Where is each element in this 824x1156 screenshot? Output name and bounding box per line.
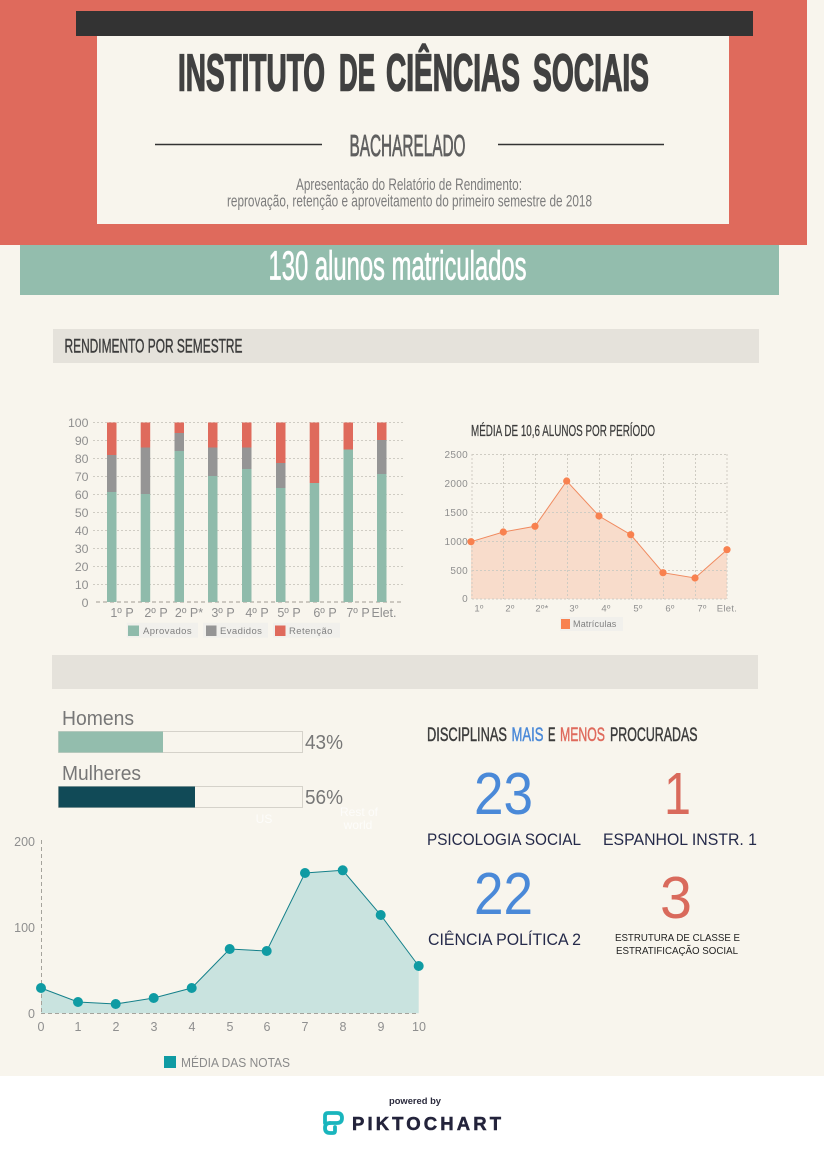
gender bar: mulheres: Mulheres bbox=[62, 763, 141, 785]
stacked bar chart bbox=[68, 416, 404, 638]
stat: estrutura de classe bbox=[615, 865, 740, 957]
stat: ciencia politica: 22 bbox=[474, 861, 533, 927]
faint map labels: US bbox=[256, 812, 272, 826]
area chart: media das notas: 8 bbox=[340, 1020, 347, 1034]
report description bbox=[227, 176, 592, 210]
faint map labels: world bbox=[343, 818, 372, 832]
gender bar: homens: 43% bbox=[305, 732, 343, 754]
chart legend: Matrículas bbox=[573, 619, 617, 629]
stacked bar chart: 10 bbox=[75, 578, 89, 592]
report description: Apresentação do Relatório de Rendimento: bbox=[296, 176, 522, 194]
stacked bar chart: 5º P bbox=[277, 606, 301, 620]
stat: estrutura de classe: ESTRUTURA DE CLASSE E bbox=[615, 933, 740, 944]
stat: psicologia social bbox=[427, 761, 581, 849]
stat: estrutura de classe: ESTRATIFICAÇÃO SOCIAL bbox=[616, 944, 738, 957]
area chart: matriculas: 3º bbox=[569, 604, 579, 614]
stacked bar chart: 70 bbox=[75, 470, 89, 484]
area chart: media das notas: 3 bbox=[151, 1020, 158, 1034]
gender bar: mulheres: 56% bbox=[305, 787, 343, 809]
area chart: matriculas: 2000 bbox=[445, 479, 468, 490]
stacked bar chart: 50 bbox=[75, 506, 89, 520]
area chart: media das notas: 4 bbox=[189, 1020, 196, 1034]
gender bar: mulheres bbox=[58, 763, 343, 809]
stacked bar chart: 2º P bbox=[144, 606, 168, 620]
chart legend bbox=[127, 623, 340, 638]
stacked bar chart: 90 bbox=[75, 434, 89, 448]
area chart: matriculas bbox=[445, 450, 737, 631]
gender bar: homens: Homens bbox=[62, 708, 134, 730]
stacked bar chart: Elet. bbox=[371, 606, 397, 620]
gender bar: homens bbox=[58, 708, 343, 754]
stacked bar chart: 40 bbox=[75, 524, 89, 538]
faint map labels bbox=[256, 805, 379, 832]
area chart: media das notas: 6 bbox=[264, 1020, 271, 1034]
area chart: media das notas: 7 bbox=[302, 1020, 309, 1034]
stat: estrutura de classe: 3 bbox=[660, 865, 692, 931]
area chart: media das notas: 5 bbox=[227, 1020, 234, 1034]
enrolled students band bbox=[20, 242, 779, 295]
area chart: media das notas: 0 bbox=[28, 1007, 35, 1021]
report description: reprovação, retenção e aproveitamento do primeiro semestre de 2018 bbox=[227, 192, 592, 210]
area chart: matriculas: 5º bbox=[633, 604, 643, 614]
icon: piktochart logo bbox=[325, 1113, 342, 1133]
subtitle: BACHARELADO bbox=[350, 128, 466, 163]
stacked bar chart: 2º P* bbox=[175, 606, 203, 620]
area chart: matriculas: 4º bbox=[601, 604, 611, 614]
title: DE bbox=[339, 44, 375, 102]
area chart: media das notas: 1 bbox=[75, 1020, 82, 1034]
disciplines heading bbox=[427, 725, 698, 746]
stat: psicologia social: PSICOLOGIA SOCIAL bbox=[427, 830, 581, 849]
area chart: matriculas: 1000 bbox=[445, 537, 468, 548]
disciplines heading: DISCIPLINAS bbox=[427, 725, 507, 746]
stacked bar chart: 6º P bbox=[313, 606, 337, 620]
stacked bar chart: 60 bbox=[75, 488, 89, 502]
stat: ciencia politica: CIÊNCIA POLÍTICA 2 bbox=[428, 930, 581, 949]
disciplines heading: MENOS bbox=[560, 725, 605, 746]
stat: espanhol: 1 bbox=[664, 761, 691, 827]
stacked bar chart: 100 bbox=[68, 416, 89, 430]
line chart title: MÉDIA DE 10,6 ALUNOS POR PERÍODO bbox=[471, 421, 655, 440]
stacked bar chart: 7º P bbox=[346, 606, 370, 620]
disciplines heading: E bbox=[548, 725, 556, 746]
chart legend bbox=[560, 617, 623, 631]
area chart: matriculas: 500 bbox=[450, 566, 468, 577]
footer bbox=[0, 1076, 824, 1156]
footer: PIKTOCHART bbox=[352, 1113, 502, 1134]
disciplines heading: MAIS bbox=[512, 725, 544, 746]
title bbox=[178, 44, 649, 102]
title: SOCIAIS bbox=[533, 44, 649, 102]
stacked bar chart: 30 bbox=[75, 542, 89, 556]
stacked bar chart: 80 bbox=[75, 452, 89, 466]
section heading: rendimento: RENDIMENTO POR SEMESTRE bbox=[64, 336, 242, 358]
footer: powered by bbox=[389, 1096, 442, 1107]
area chart: matriculas: 2º bbox=[505, 604, 515, 614]
area chart: matriculas: 1º bbox=[474, 604, 484, 614]
faint map labels: Rest of bbox=[340, 805, 379, 819]
stacked bar chart: 0 bbox=[82, 596, 89, 610]
area chart: matriculas: 1500 bbox=[445, 508, 468, 519]
disciplines heading: PROCURADAS bbox=[610, 725, 698, 746]
area chart: media das notas: 9 bbox=[378, 1020, 385, 1034]
area chart: media das notas bbox=[14, 835, 426, 1070]
enrolled students band: 130 alunos matriculados bbox=[268, 242, 526, 288]
area chart: matriculas: 2500 bbox=[445, 450, 468, 461]
empty section band bbox=[52, 655, 758, 689]
area chart: matriculas: Elet. bbox=[717, 604, 737, 614]
stat: psicologia social: 23 bbox=[474, 761, 533, 827]
area chart: media das notas: 10 bbox=[412, 1020, 426, 1034]
bars: evadidos bbox=[107, 433, 386, 494]
area chart: media das notas: 2 bbox=[113, 1020, 120, 1034]
header banner bbox=[0, 0, 807, 245]
chart legend: Aprovados bbox=[143, 626, 192, 637]
area chart: media das notas: 0 bbox=[38, 1020, 45, 1034]
area chart: media das notas: 200 bbox=[14, 835, 35, 849]
area chart: matriculas: 7º bbox=[697, 604, 707, 614]
bars: aprovados bbox=[107, 450, 386, 602]
area chart: media das notas: 100 bbox=[14, 921, 35, 935]
section heading: rendimento bbox=[53, 329, 759, 363]
stat: espanhol bbox=[603, 761, 757, 849]
title: CIÊNCIAS bbox=[386, 44, 520, 102]
stat: espanhol: ESPANHOL INSTR. 1 bbox=[603, 830, 757, 849]
chart legend: Evadidos bbox=[220, 626, 262, 637]
stacked bar chart: 3º P bbox=[211, 606, 235, 620]
title: INSTITUTO bbox=[178, 44, 325, 102]
area chart: matriculas: 2º* bbox=[535, 604, 549, 614]
stat: ciencia politica bbox=[428, 861, 581, 949]
area chart: matriculas: 6º bbox=[665, 604, 675, 614]
stacked bar chart: 1º P bbox=[110, 606, 134, 620]
stacked bar chart: 20 bbox=[75, 560, 89, 574]
chart legend: MÉDIA DAS NOTAS bbox=[181, 1055, 290, 1070]
chart legend: Retenção bbox=[289, 626, 333, 637]
stacked bar chart: 4º P bbox=[245, 606, 269, 620]
area chart: matriculas: 0 bbox=[462, 594, 468, 605]
bars: retencao bbox=[107, 422, 386, 483]
